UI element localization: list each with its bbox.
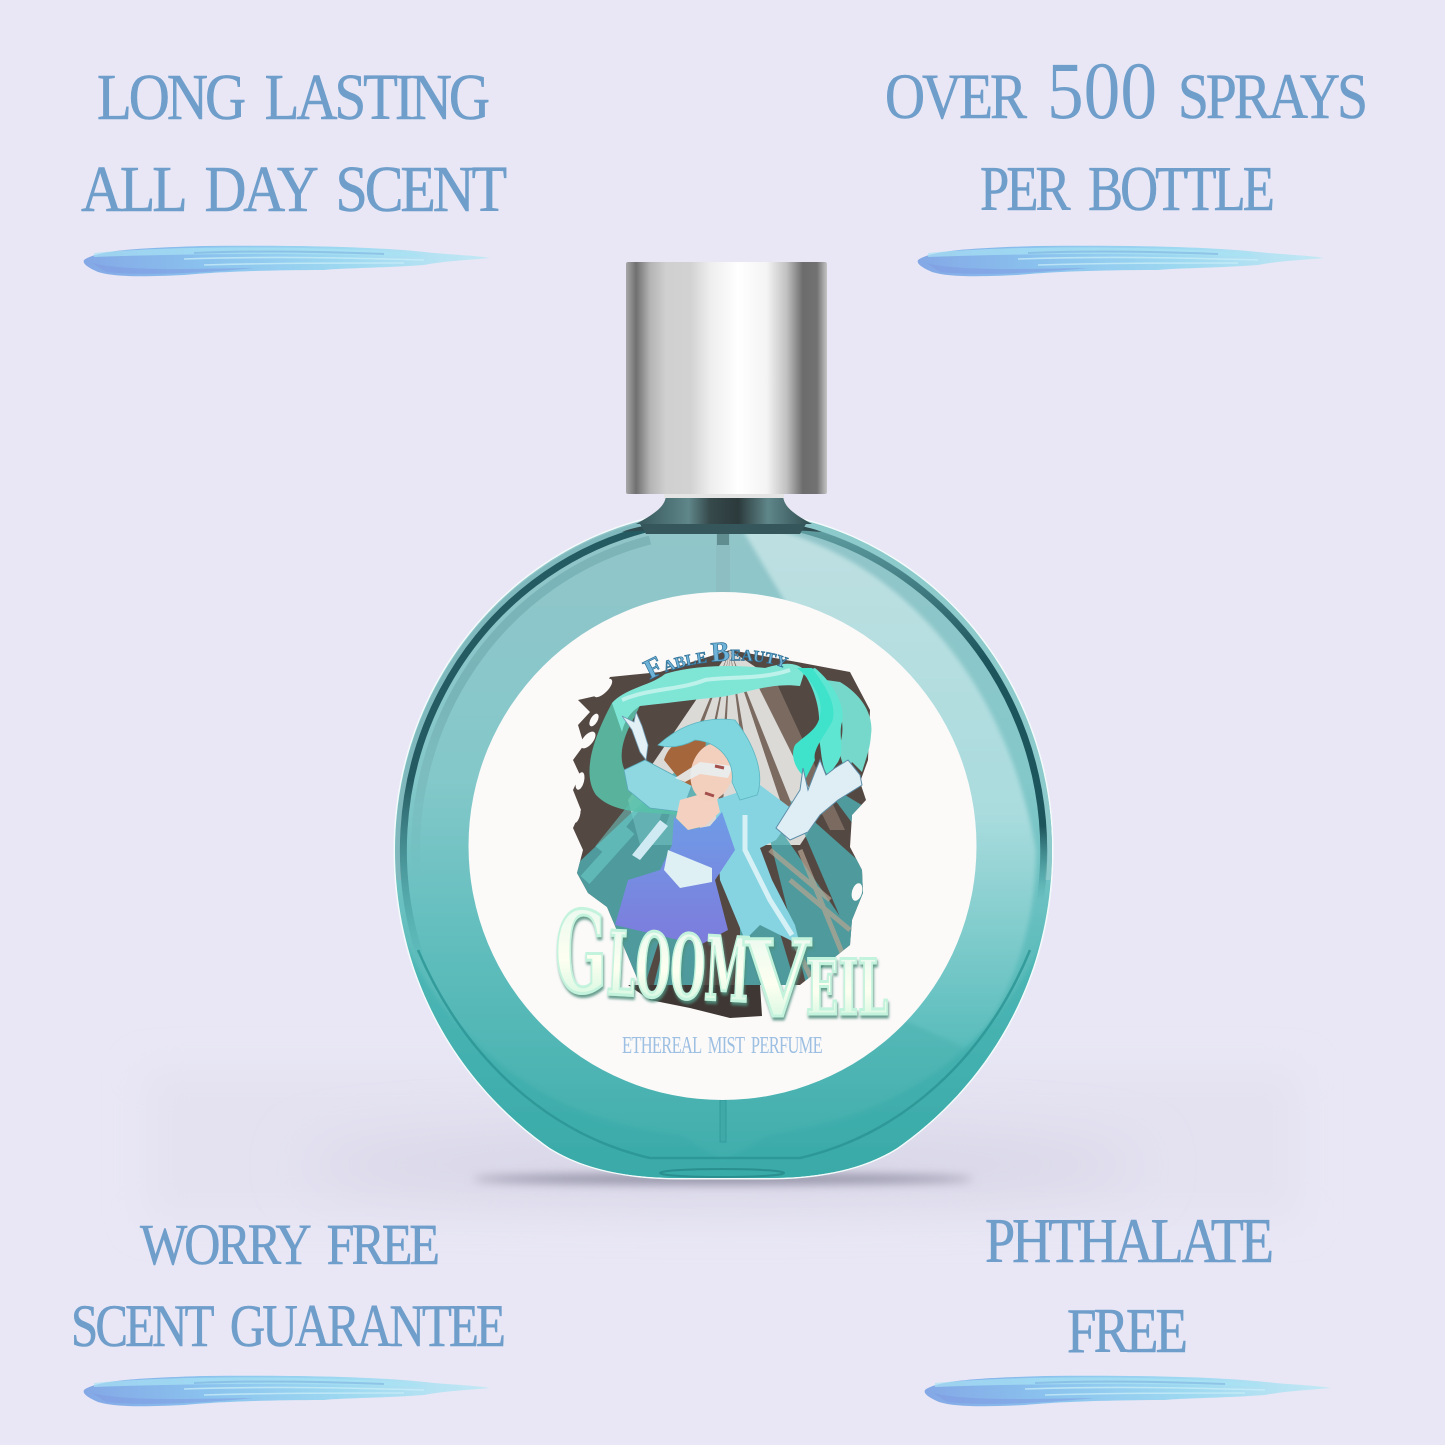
heading: over 500 sprays per bottle: OVER <box>885 61 1028 133</box>
right hand glove <box>776 760 862 840</box>
mist strands <box>793 668 871 778</box>
dark splash under title <box>628 985 762 1018</box>
product name: gloom veil: LOOM <box>605 911 752 1022</box>
product name: gloom veil: EIL <box>806 943 888 1032</box>
hair <box>664 739 706 790</box>
woven lower stripes <box>770 850 850 980</box>
heading: worry free scent guarantee: SCENT GUARANTEE <box>71 1293 504 1359</box>
product name: gloom veil: G <box>555 888 607 1019</box>
divider brush stroke: bottom right <box>925 1376 1331 1406</box>
cloak and figure <box>615 719 800 945</box>
heading: phthalate free: FREE <box>1067 1296 1186 1366</box>
inner glass edge lines <box>418 950 1030 1158</box>
bottle neck <box>636 494 812 524</box>
lower teal band <box>406 941 1041 1178</box>
base ellipse <box>660 1169 784 1177</box>
top mist ribbon <box>612 664 805 732</box>
hood <box>658 719 760 800</box>
face <box>685 739 739 805</box>
cloak edge highlight <box>745 815 792 935</box>
outer rim band <box>398 525 640 880</box>
heading: long lasting all day scent <box>81 61 507 226</box>
right highlight panel <box>738 522 1036 1050</box>
floor shadow <box>145 1070 1300 1220</box>
eye and lips <box>705 766 724 796</box>
cloak back <box>715 785 800 945</box>
heading: long lasting all day scent: ALL DAY SCENT <box>81 153 507 226</box>
sash <box>664 850 712 888</box>
bottle body <box>390 505 1060 1190</box>
skin chest <box>676 790 720 830</box>
divider brush stroke: bottom left <box>84 1376 490 1406</box>
heading: over 500 sprays per bottle: PER BOTTLE <box>980 154 1273 224</box>
product name: gloom veil <box>555 888 888 1041</box>
torn holes <box>572 676 864 902</box>
left green mist <box>589 703 690 815</box>
subtitle: ethereal mist perfume: ETHEREAL MIST PERFUME <box>622 1033 822 1059</box>
perfume bottle <box>390 262 1060 1190</box>
white round label <box>468 592 976 1100</box>
dip tube <box>716 534 730 592</box>
heading: over 500 sprays per bottle: SPRAYS <box>1178 61 1365 133</box>
teal rays <box>577 742 863 985</box>
heading: over 500 sprays per bottle <box>885 45 1365 224</box>
right dark rim <box>800 529 1044 910</box>
soft inner rim <box>416 536 651 798</box>
heading: phthalate free <box>985 1206 1272 1366</box>
light ray fan <box>628 650 808 845</box>
brand arc: fable beauty: FABLE BEAUTY <box>642 642 789 680</box>
label illustration <box>555 642 891 1059</box>
heading: over 500 sprays per bottle: 500 <box>1047 45 1157 136</box>
silver cap <box>626 262 827 498</box>
ray gaps <box>655 650 845 830</box>
heading: long lasting all day scent: LONG LASTING <box>97 61 489 134</box>
top shoulder shadow <box>622 526 822 532</box>
heading: phthalate free: PHTHALATE <box>985 1206 1272 1276</box>
dress <box>615 812 735 945</box>
left sleeve <box>624 760 692 812</box>
left dark rim <box>403 528 650 960</box>
heading: worry free scent guarantee <box>71 1212 504 1359</box>
divider brush stroke: top right <box>918 246 1324 276</box>
veil <box>675 762 733 782</box>
product name: gloom veil: V <box>743 916 811 1041</box>
bottle rim highlight <box>395 510 1052 1178</box>
sash ribbon <box>632 820 668 860</box>
divider brush stroke: top left <box>84 246 490 276</box>
torn dark backdrop <box>573 650 870 985</box>
left hand <box>622 712 648 760</box>
heading: worry free scent guarantee: WORRY FREE <box>140 1212 438 1277</box>
